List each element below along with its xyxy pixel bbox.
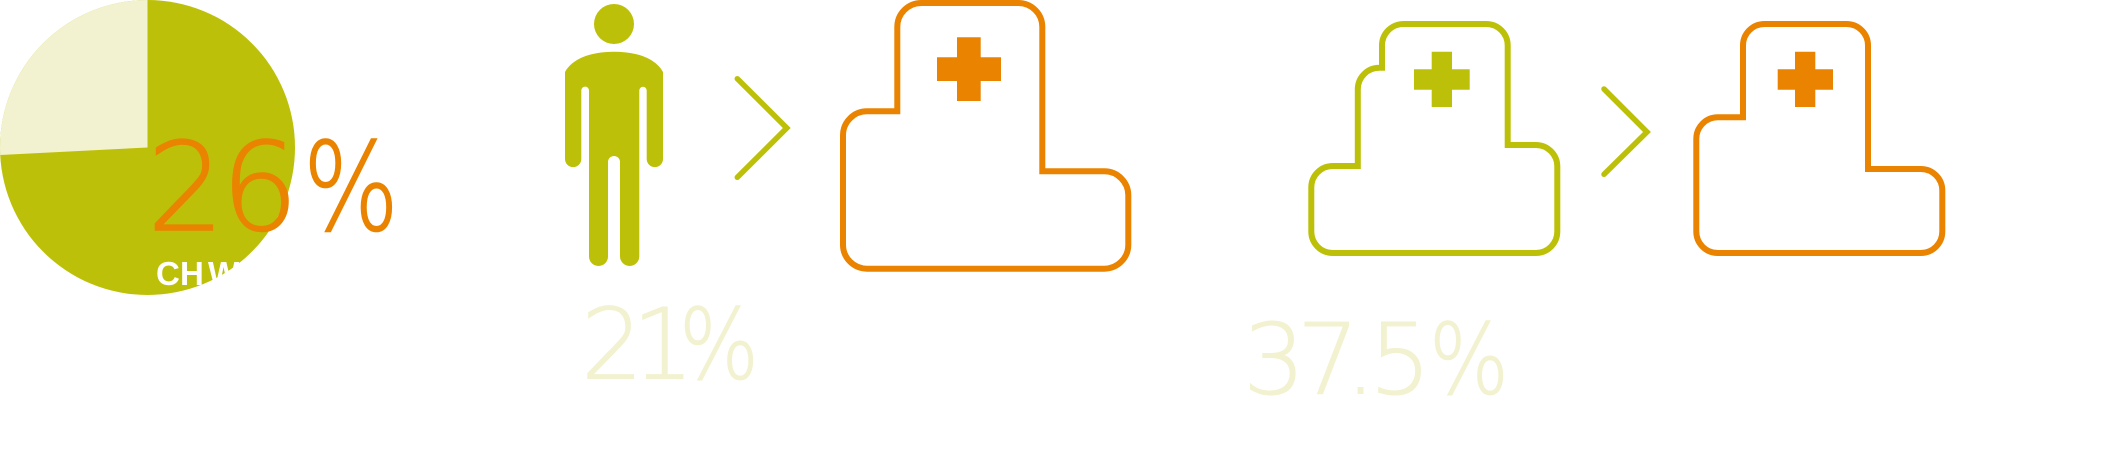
pie slice: light segment	[0, 0, 148, 155]
pie chart	[0, 0, 295, 295]
value: 21%: 21	[581, 288, 694, 402]
icon: hospital large	[843, 3, 1128, 269]
value: 37.5%: %	[1429, 304, 1509, 418]
arrow: chevron 2	[1604, 89, 1647, 174]
value: 26%: 26	[147, 117, 299, 259]
value: 21%	[581, 288, 759, 402]
value: 26%: %	[303, 117, 399, 259]
icon: hospital small	[1696, 24, 1942, 253]
label: CHW: CHW	[156, 255, 240, 292]
icon: person	[565, 4, 663, 266]
value: 21%: %	[679, 288, 759, 402]
value: 37.5%: 37.5	[1243, 304, 1431, 418]
value: 26%	[147, 117, 399, 259]
icon: hospital medium	[1311, 24, 1557, 253]
arrow: chevron 1	[737, 79, 787, 177]
